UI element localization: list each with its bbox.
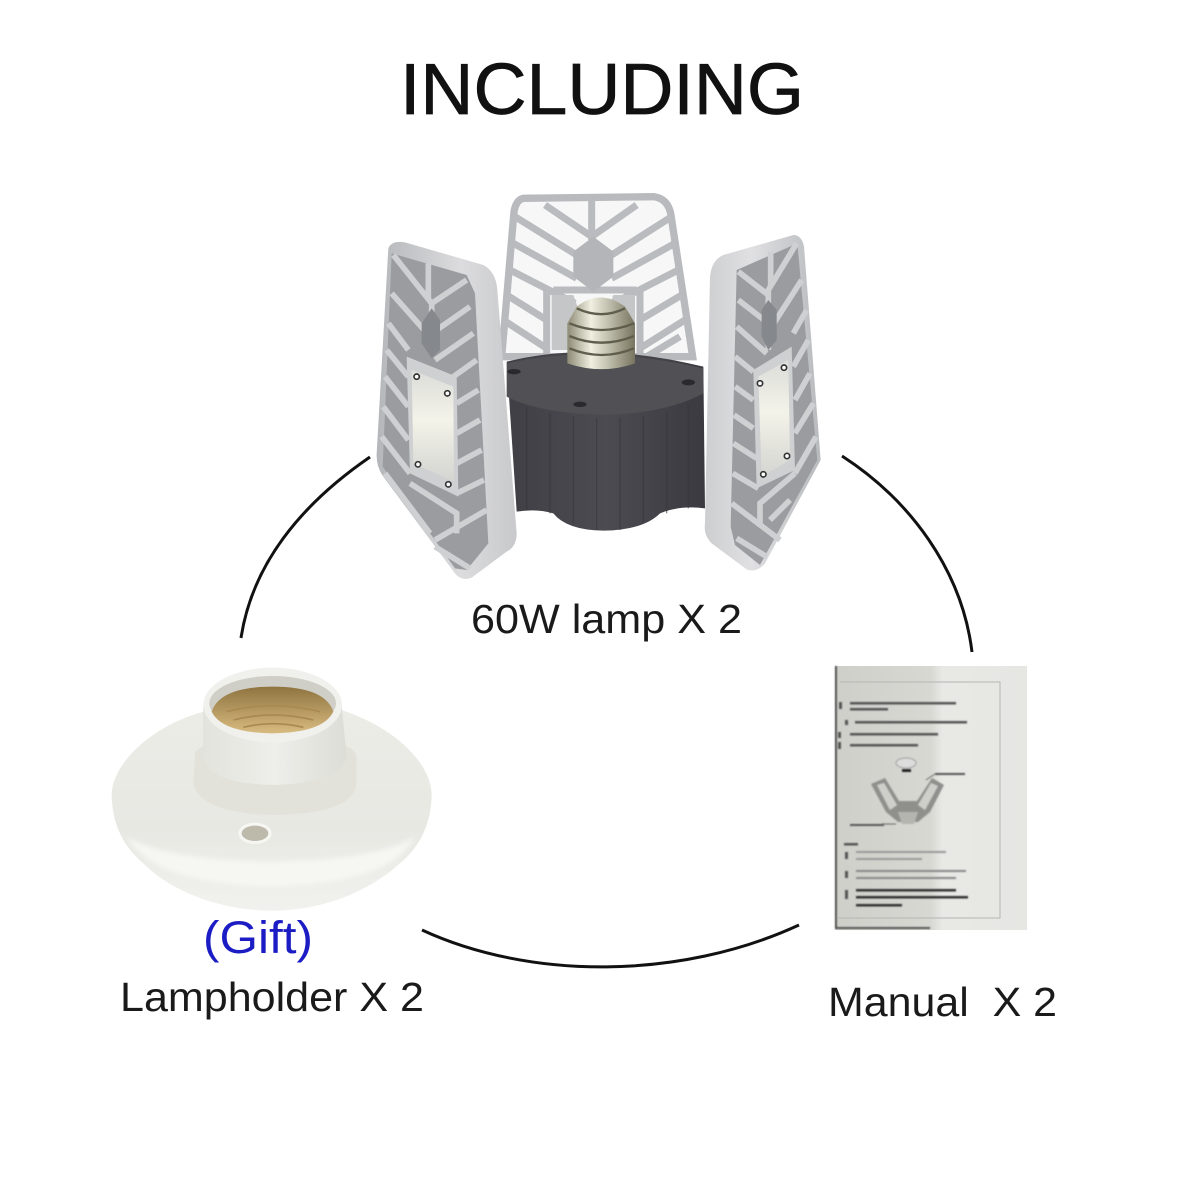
- label: lampholder: Lampholder X 2: [120, 974, 424, 1020]
- stepped ring: [193, 747, 357, 815]
- paper sheet: [835, 666, 1027, 930]
- manual instruction lines: [838, 702, 968, 906]
- paper edge shading: [836, 666, 930, 929]
- label: lamp: 60W lamp X 2: [471, 596, 742, 642]
- right panel: [705, 235, 821, 570]
- round base: [112, 710, 432, 911]
- left panel: [377, 242, 517, 579]
- title: INCLUDING: [400, 50, 804, 130]
- neck: [203, 705, 347, 785]
- arc: lamp to lampholder: [241, 457, 370, 638]
- screw hole: [238, 823, 272, 844]
- back panel: [502, 197, 693, 357]
- manual photo: [835, 666, 1027, 930]
- arc: lamp to manual: [842, 456, 972, 652]
- lamp photo: [377, 197, 821, 579]
- socket opening: [203, 668, 342, 742]
- manual lamp diagram: [871, 758, 944, 824]
- dark body: [507, 352, 705, 531]
- screw base: [567, 297, 635, 369]
- label: gift: (Gift): [203, 912, 313, 963]
- label: manual: Manual X 2: [828, 979, 1057, 1025]
- arc: lampholder to manual: [422, 925, 799, 967]
- lampholder photo: [112, 668, 432, 911]
- inner frame: [838, 682, 1000, 918]
